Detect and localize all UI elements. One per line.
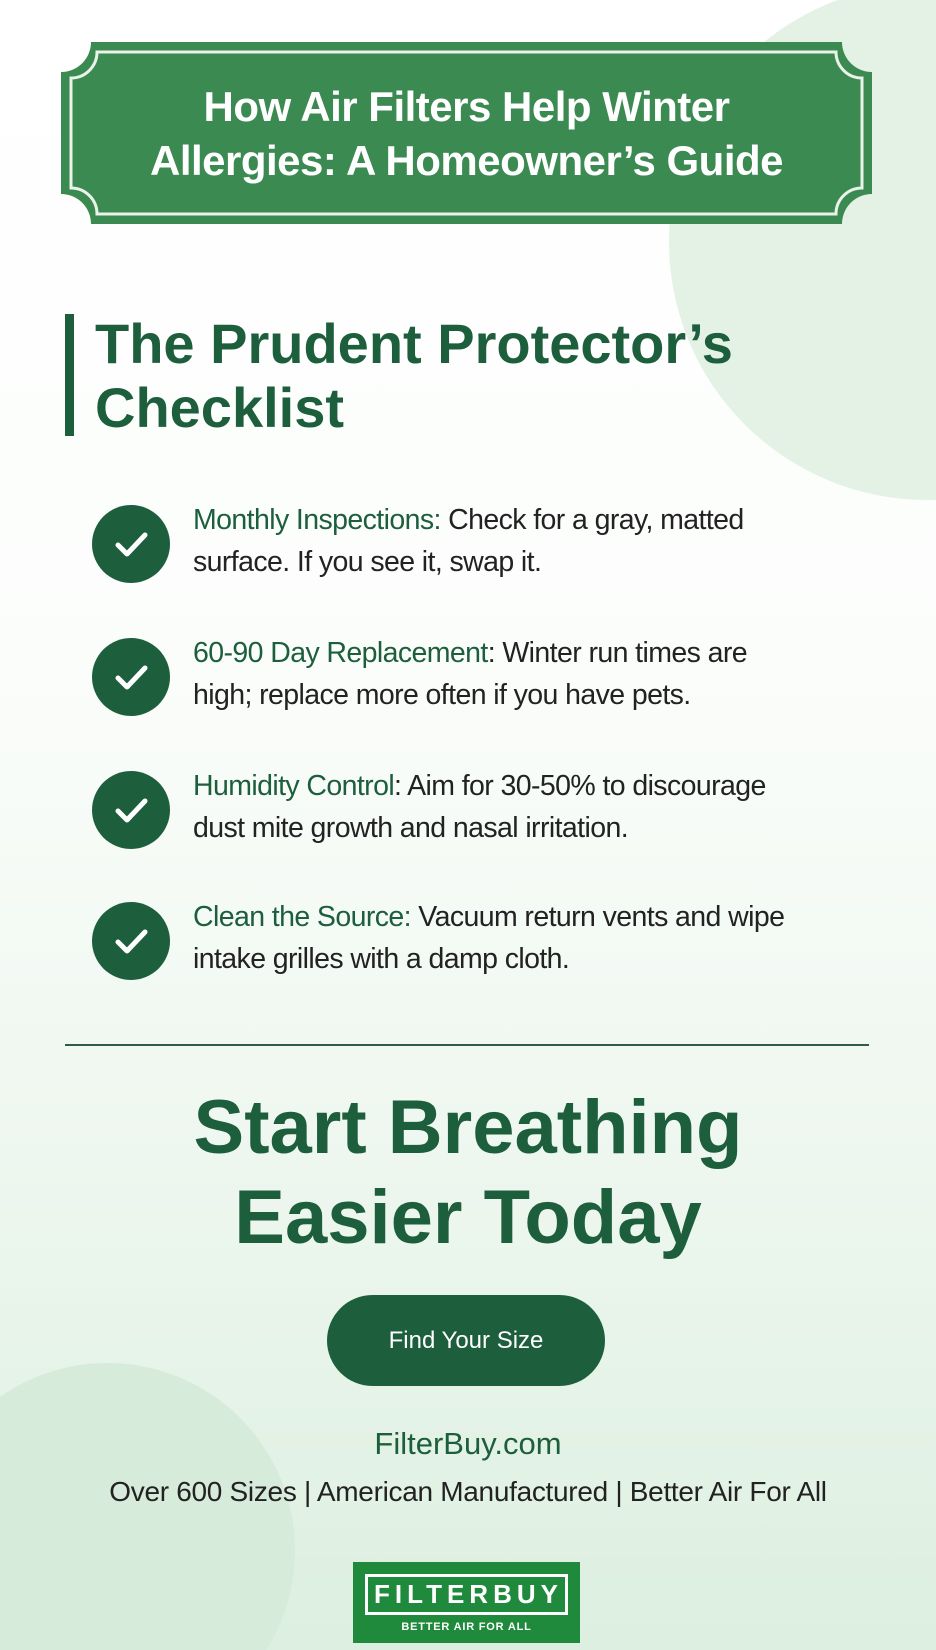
icon: check [92,902,170,980]
checklist item 1 [92,504,744,583]
checklist item 2: 60-90 Day Replacement: Winter run times are [193,637,747,669]
button [327,1295,605,1386]
tagline: Over 600 Sizes | American Manufactured | Better Air For All [109,1476,827,1507]
title text [150,83,783,184]
icon: check [92,638,170,716]
title banner [61,42,872,224]
decorative circle bottom left [0,1363,295,1650]
website: FilterBuy.com [374,1426,562,1461]
CTA heading: Start Breathing [194,1085,742,1170]
checklist item 2 [92,637,747,716]
icon: check [92,505,170,583]
section heading: Checklist [95,376,344,439]
title text: Allergies: A Homeowner’s Guide [150,137,783,184]
checklist item 2: high; replace more often if you have pets. [193,679,691,711]
icon: check [92,771,170,849]
logo: BETTER AIR FOR ALL [401,1621,532,1633]
section heading: The Prudent Protector’s [95,312,733,375]
button: Find Your Size [389,1327,543,1354]
title text: How Air Filters Help Winter [204,83,729,130]
logo [353,1562,580,1643]
checklist item 1: Monthly Inspections: Check for a gray, matted [193,504,744,536]
checklist item 4 [92,901,784,980]
CTA heading [194,1085,742,1260]
checklist item 1: surface. If you see it, swap it. [193,546,541,578]
logo: FILTERBUY [374,1579,563,1609]
checklist item 3 [92,770,766,849]
CTA heading: Easier Today [234,1175,702,1260]
checklist item 4: intake grilles with a damp cloth. [193,943,569,975]
checklist item 3: Humidity Control: Aim for 30-50% to discourage [193,770,766,802]
checklist item 3: dust mite growth and nasal irritation. [193,812,628,844]
section heading [65,312,733,439]
checklist item 4: Clean the Source: Vacuum return vents and wipe [193,901,784,933]
decorative circle top right [669,0,936,500]
